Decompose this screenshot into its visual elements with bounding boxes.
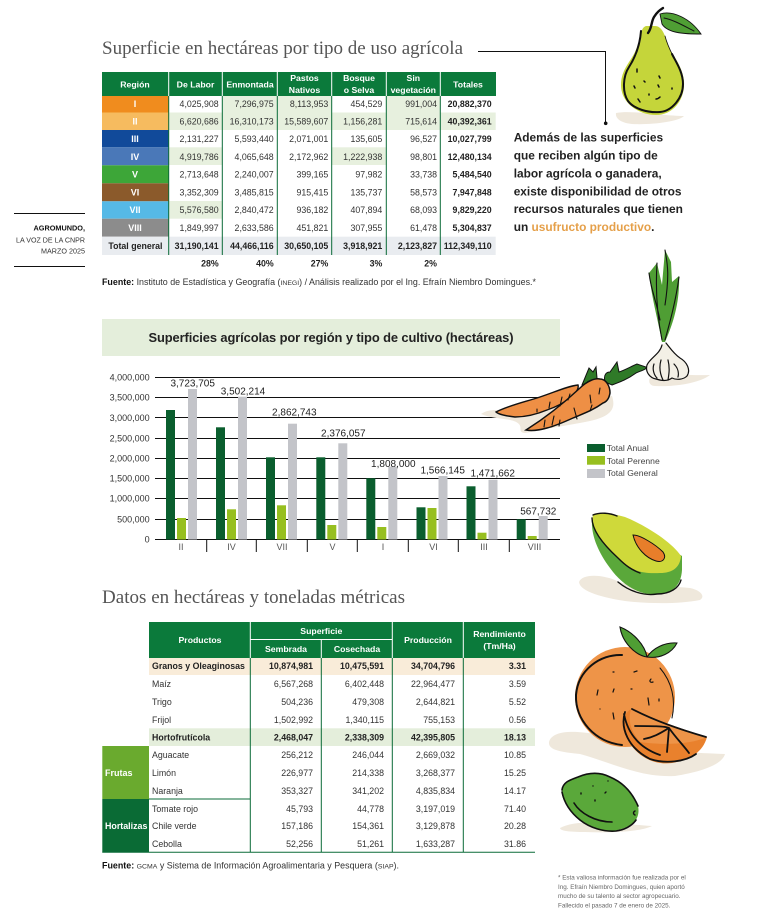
group cell: frutas: Frutas — [105, 768, 133, 778]
series: total perenne — [177, 505, 537, 540]
table header: Región — [120, 80, 150, 90]
table values: 4,919,786 — [180, 152, 219, 162]
table: productos — [102, 622, 535, 852]
table values: 2,172,962 — [289, 152, 328, 162]
highlight band: granos — [149, 658, 535, 675]
table values: 97,982 — [355, 170, 382, 180]
title: datos en hectáreas: Datos en hectáreas y toneladas métricas — [102, 587, 405, 608]
sidebar credit: AGROMUNDO, — [34, 224, 85, 232]
x axis labels: II — [178, 542, 184, 552]
y axis labels: 3,000,000 — [110, 413, 150, 423]
row labels: Trigo — [152, 697, 172, 707]
x axis labels: I — [382, 542, 384, 552]
table values: 2,669,032 — [416, 750, 455, 760]
value labels: 2,862,743 — [272, 407, 317, 418]
table values: 10,874,981 — [269, 661, 313, 671]
y axis labels: 0 — [145, 534, 150, 544]
table values: 1,849,997 — [180, 223, 219, 233]
table values: 1,156,281 — [343, 117, 382, 127]
table values: 1,633,287 — [416, 839, 455, 849]
table values: 22,964,477 — [411, 679, 455, 689]
table values: 2,123,827 — [398, 241, 437, 251]
table values: 71.40 — [504, 804, 526, 814]
table values: 5,304,837 — [453, 223, 492, 233]
x axis labels: III — [480, 542, 488, 552]
table header: Totales — [453, 80, 483, 90]
region colour cells: III — [131, 134, 139, 144]
legend: Total Anual — [607, 443, 649, 453]
highlight band: hortofrutícola — [149, 728, 535, 746]
table values: 226,977 — [281, 768, 313, 778]
row labels: Tomate rojo — [152, 804, 198, 814]
icon: pear — [616, 8, 701, 124]
callout text: existe disponibilidad de otros — [514, 184, 682, 198]
table header: Enmontada — [226, 80, 274, 90]
footnote: Fallecido el pasado 7 de enero de 2025. — [558, 902, 671, 910]
source note: table 1: Fuente: Instituto de Estadística y Geografía (INEGI) / Análisis realizado por el Ing. Efraín Niembro Domingues.* — [102, 277, 537, 287]
sidebar credit — [14, 214, 85, 266]
icon: onion — [647, 250, 710, 386]
table header: (Tm/Ha) — [483, 641, 516, 651]
row labels: Aguacate — [152, 750, 189, 760]
row labels — [152, 661, 245, 849]
region colour cells: VI — [131, 188, 139, 198]
table values: 96,527 — [410, 134, 437, 144]
table values: 3.31 — [509, 661, 526, 671]
table values: 34,704,796 — [411, 661, 455, 671]
highlighted cells — [169, 96, 496, 219]
region colour cells — [102, 96, 169, 237]
table values — [269, 661, 526, 849]
table header: Producción — [404, 635, 452, 645]
table values: 3,268,377 — [416, 768, 455, 778]
x axis labels: V — [329, 542, 336, 552]
table header: Sembrada — [265, 644, 307, 654]
x axis labels: VIII — [528, 542, 541, 552]
table header: Productos — [179, 635, 222, 645]
table header — [102, 72, 496, 96]
table values: 157,186 — [281, 821, 313, 831]
table values: 14.17 — [504, 786, 526, 796]
table values: 479,308 — [352, 697, 384, 707]
table values: 6,402,448 — [345, 679, 384, 689]
table values: 755,153 — [423, 715, 455, 725]
region colour cells: VIII — [128, 223, 142, 233]
row labels: Naranja — [152, 786, 183, 796]
sidebar credit: MARZO 2025 — [41, 246, 85, 256]
table values: 2,468,047 — [274, 732, 313, 742]
table values: 715,614 — [405, 117, 437, 127]
table values: 51,261 — [357, 839, 384, 849]
series: total anual — [166, 410, 526, 540]
region colour cells: VII — [129, 205, 141, 215]
table header: Nativos — [289, 85, 320, 95]
table values: 2,240,007 — [235, 170, 274, 180]
table values: 42,395,805 — [411, 732, 455, 742]
table values: 214,338 — [352, 768, 384, 778]
callout text: Además de las superficies — [514, 130, 663, 144]
y axis labels: 500,000 — [117, 514, 150, 524]
table values — [108, 99, 492, 251]
table values: 58,573 — [410, 188, 437, 198]
table header: Cosechada — [334, 644, 380, 654]
table values: 15,589,607 — [284, 117, 328, 127]
callout text: un usufructo productivo. — [514, 220, 654, 234]
table values: 3.59 — [509, 679, 526, 689]
table values: 40,392,361 — [448, 117, 492, 127]
percent row: 28% — [201, 258, 219, 268]
sidebar credit: LA VOZ DE LA CNPR — [16, 236, 85, 245]
group cell: hortalizas: Hortalizas — [105, 821, 147, 831]
row labels: Limón — [152, 768, 176, 778]
y axis labels: 4,000,000 — [110, 372, 150, 382]
table values: 10.85 — [504, 750, 526, 760]
percent row: 40% — [256, 258, 274, 268]
y axis labels: 2,000,000 — [110, 454, 150, 464]
table values: 454,529 — [350, 99, 382, 109]
legend: Total Perenne — [607, 456, 660, 466]
callout text: que reciben algún tipo de — [514, 148, 658, 162]
table values: 68,093 — [410, 205, 437, 215]
y axis labels: 1,000,000 — [110, 494, 150, 504]
table values: 5,576,580 — [180, 205, 219, 215]
table values: 2,071,001 — [289, 134, 328, 144]
source note: table 2: Fuente: GCMA y Sistema de Información Agroalimentaria y Pesquera ( SIAP). — [102, 860, 399, 870]
table values: 10,475,591 — [340, 661, 384, 671]
table values: 7,296,975 — [235, 99, 274, 109]
row labels: Chile verde — [152, 821, 197, 831]
total row band — [102, 237, 496, 255]
table values: 2,131,227 — [180, 134, 219, 144]
x axis labels: IV — [227, 542, 236, 552]
row labels: Granos y Oleaginosas — [152, 661, 245, 671]
table values: 33,738 — [410, 170, 437, 180]
callout text: labor agrícola o ganadera, — [514, 166, 662, 180]
icon: orange — [549, 627, 725, 776]
footnote: mucho de su talento al sector agropecuario. — [558, 893, 681, 900]
region colour cells: IV — [131, 152, 139, 162]
table header — [149, 622, 535, 658]
table header: Superficie — [300, 626, 342, 636]
table values: 2,338,309 — [345, 732, 384, 742]
value labels: 1,566,145 — [420, 466, 465, 477]
table values: 4,065,648 — [235, 152, 274, 162]
icon: lime — [560, 773, 652, 832]
table values: 5,484,540 — [453, 170, 492, 180]
table values: 353,327 — [281, 786, 313, 796]
value labels: 3,723,705 — [170, 379, 215, 390]
footnote: * Esta valiosa información fue realizada por el — [558, 874, 686, 882]
table values: 2,644,821 — [416, 697, 455, 707]
legend — [587, 443, 660, 478]
table values: 9,829,220 — [453, 205, 492, 215]
table values: 5.52 — [509, 697, 526, 707]
table values: 12,480,134 — [448, 152, 492, 162]
title: superficie en hectáreas: Superficie en hectáreas por tipo de uso agrícola — [102, 38, 464, 59]
table values: 2,713,648 — [180, 170, 219, 180]
table header: Bosque — [343, 73, 375, 83]
connector line from title to callout — [478, 52, 608, 125]
table values: 7,947,848 — [453, 188, 492, 198]
table values: 20,882,370 — [448, 99, 492, 109]
table values: 52,256 — [286, 839, 313, 849]
percent row: 27% — [311, 258, 328, 268]
x axis labels — [178, 542, 541, 552]
region colour cells: II — [132, 117, 138, 127]
title: chart band — [102, 319, 560, 356]
table values: 44,466,116 — [230, 241, 274, 251]
table values: 4,835,834 — [416, 786, 455, 796]
legend: Total General — [607, 468, 658, 478]
table header: o Selva — [344, 85, 374, 95]
table values: 1,222,938 — [343, 152, 382, 162]
table values: 307,955 — [350, 223, 382, 233]
region colour cells: V — [132, 170, 138, 180]
table values: 10,027,799 — [448, 134, 492, 144]
series: total general — [188, 389, 548, 540]
y axis labels: 1,500,000 — [110, 474, 150, 484]
table values: 18.13 — [504, 732, 526, 742]
table values: 45,793 — [286, 804, 313, 814]
footnote — [558, 874, 686, 910]
table header: De Labor — [177, 80, 215, 90]
x axis labels: VI — [429, 542, 438, 552]
row labels: Hortofrutícola — [152, 732, 210, 742]
table values: Total general — [108, 241, 162, 251]
row labels: Maíz — [152, 679, 171, 689]
y axis labels: 3,500,000 — [110, 392, 150, 402]
region colour cells: I — [134, 99, 136, 109]
title: chart band: Superficies agrícolas por región y tipo de cultivo (hectáreas) — [148, 330, 514, 345]
value labels: 1,808,000 — [371, 459, 416, 470]
table values: 3,129,878 — [416, 821, 455, 831]
table values: 256,212 — [281, 750, 313, 760]
group cell: hortalizas — [102, 799, 149, 852]
percent row: 3% — [370, 258, 382, 268]
icon: carrots — [481, 362, 646, 433]
table header: Sin — [407, 73, 420, 83]
row labels: Cebolla — [152, 839, 182, 849]
value labels: 2,376,057 — [321, 429, 366, 440]
table values: 4,025,908 — [180, 99, 219, 109]
footnote: Ing. Efraín Niembro Domingues, quien aportó — [558, 884, 685, 891]
table values: 407,894 — [350, 205, 382, 215]
callout text: recursos naturales que tienen — [514, 202, 683, 216]
table values: 112,349,110 — [444, 241, 492, 251]
table values: 5,593,440 — [235, 134, 274, 144]
table: superficie por región — [102, 72, 496, 268]
table values: 399,165 — [296, 170, 328, 180]
table values: 1,340,115 — [346, 715, 384, 725]
table values: 31.86 — [504, 839, 526, 849]
y axis labels: 2,500,000 — [110, 434, 150, 444]
table values: 135,737 — [350, 188, 382, 198]
table values: 44,778 — [357, 804, 384, 814]
table values: 98,801 — [410, 152, 437, 162]
table values: 341,202 — [352, 786, 384, 796]
icon: avocado — [579, 513, 702, 603]
table values: 3,918,921 — [343, 241, 382, 251]
bar chart — [110, 372, 560, 552]
table values: 31,190,141 — [175, 241, 219, 251]
table values: 6,620,686 — [180, 117, 219, 127]
table values: 0.56 — [509, 715, 526, 725]
percent row: 2% — [424, 258, 437, 268]
table values: 6,567,268 — [274, 679, 313, 689]
y axis labels — [110, 372, 150, 544]
group cell: frutas — [102, 746, 149, 799]
value labels: 567,732 — [520, 506, 557, 517]
callout text — [514, 130, 683, 234]
table values: 135,605 — [350, 134, 382, 144]
table values: 154,361 — [352, 821, 384, 831]
table header: Rendimiento — [473, 629, 526, 639]
table values: 61,478 — [410, 223, 437, 233]
table values: 30,650,105 — [284, 241, 328, 251]
table values: 504,236 — [281, 697, 313, 707]
table values: 1,502,992 — [274, 715, 313, 725]
table values: 15.25 — [504, 768, 526, 778]
table values: 8,113,953 — [290, 99, 328, 109]
table values: 915,415 — [296, 188, 328, 198]
table values: 2,633,586 — [235, 223, 274, 233]
table values: 3,352,309 — [180, 188, 219, 198]
value labels: 1,471,662 — [470, 468, 515, 479]
table values: 3,485,815 — [235, 188, 274, 198]
table values: 3,197,019 — [416, 804, 455, 814]
value labels: 3,502,214 — [221, 387, 266, 398]
table values: 451,821 — [296, 223, 328, 233]
table values: 16,310,173 — [230, 117, 274, 127]
table values: 2,840,472 — [235, 205, 274, 215]
row labels: Frijol — [152, 715, 171, 725]
table values: 20.28 — [504, 821, 526, 831]
x axis labels: VII — [276, 542, 288, 552]
table values: 936,182 — [296, 205, 328, 215]
table header: Pastos — [290, 73, 319, 83]
table values: 991,004 — [405, 99, 437, 109]
table header: vegetación — [391, 85, 436, 95]
value labels — [170, 379, 557, 517]
table values: 246,044 — [352, 750, 384, 760]
percent row — [201, 258, 437, 268]
